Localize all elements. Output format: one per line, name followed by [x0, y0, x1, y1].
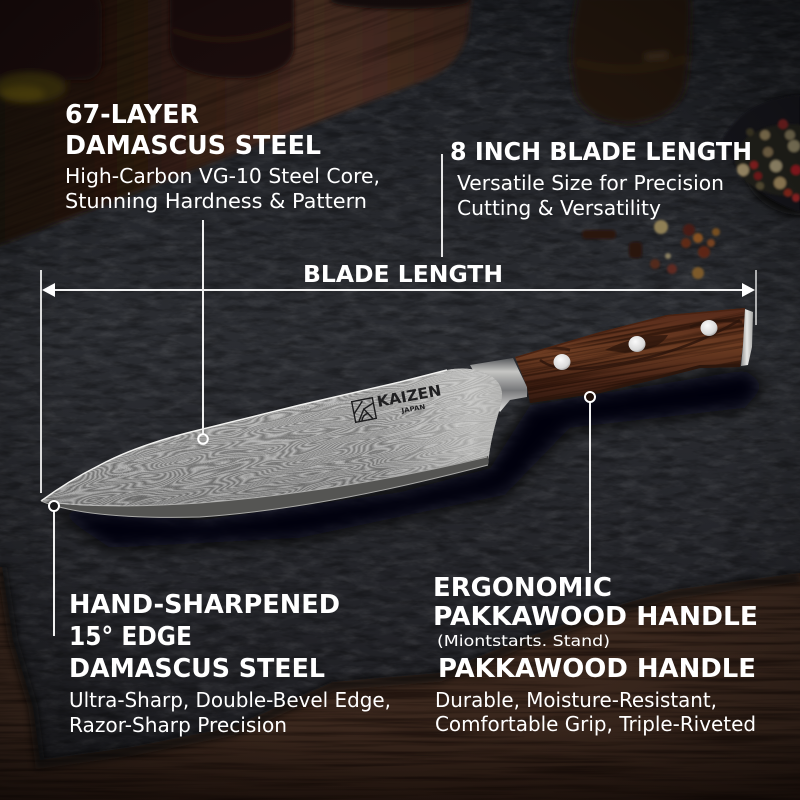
- text block: 8 inch blade length: Versatile Size for Precision: [457, 171, 724, 195]
- leader and marker: handle: [585, 392, 595, 573]
- text block: 67-layer damascus steel: [65, 100, 380, 213]
- text block: 67-layer damascus steel: High-Carbon VG-10 Steel Core,: [65, 164, 380, 188]
- logo mark: [352, 398, 376, 422]
- spice bowl with peppercorns: [722, 95, 800, 215]
- text block: hand-sharpened edge: 15° EDGE: [69, 622, 192, 652]
- text block: ergonomic pakkawood handle: Durable, Moisture-Resistant,: [435, 688, 717, 712]
- chef knife: [40, 308, 753, 518]
- bolster: [470, 358, 527, 412]
- blade length dimension arrow: [41, 270, 756, 493]
- text block: hand-sharpened edge: Razor-Sharp Precision: [69, 713, 287, 737]
- text block: 8 inch blade length: Cutting & Versatility: [457, 196, 661, 220]
- text block: ergonomic pakkawood handle: ERGONOMIC: [433, 573, 612, 603]
- text block: ergonomic pakkawood handle: [433, 573, 758, 736]
- text block: hand-sharpened edge: DAMASCUS STEEL: [69, 654, 325, 684]
- blurred glass with olive oil, top left: [0, 0, 102, 103]
- end cap: [741, 309, 753, 366]
- wooden table below the slate: [0, 560, 800, 800]
- blurred pepper mill on the board: [170, 0, 294, 78]
- text block: hand-sharpened edge: HAND-SHARPENED: [69, 590, 340, 620]
- text block: 67-layer damascus steel: 67-LAYER: [65, 100, 199, 130]
- knife shadow: [50, 370, 765, 548]
- text block: ergonomic pakkawood handle: PAKKAWOOD HANDLE: [438, 654, 756, 684]
- text block: ergonomic pakkawood handle: PAKKAWOOD HANDLE: [433, 602, 758, 632]
- text block: 67-layer damascus steel: Stunning Hardness & Pattern: [65, 189, 367, 213]
- blurred objects at the top of the board: [330, 0, 470, 9]
- logo subtitle: JAPAN: [400, 403, 426, 415]
- leader and marker: damascus steel: [198, 220, 208, 444]
- text block: 67-layer damascus steel: DAMASCUS STEEL: [65, 131, 321, 161]
- logo: [352, 381, 443, 422]
- blurred pepper mill, top right: [571, 0, 690, 124]
- text block: ergonomic pakkawood handle: Comfortable Grip, Triple-Riveted: [435, 712, 756, 736]
- blade with damascus pattern: [40, 368, 502, 518]
- rivets: [554, 320, 718, 370]
- leader and marker: edge: [49, 501, 59, 636]
- handle: [515, 308, 745, 403]
- text block: ergonomic pakkawood handle: (Miontstarts. Stand): [437, 632, 610, 650]
- wooden serving board, top left: [0, 0, 472, 247]
- text block: 8 inch blade length: [450, 137, 752, 220]
- scattered spices on the slate: [582, 220, 720, 279]
- logo wordmark: KAIZEN: [375, 381, 443, 411]
- dimension label: blade length: BLADE LENGTH: [303, 260, 503, 288]
- text block: hand-sharpened edge: Ultra-Sharp, Double-Bevel Edge,: [69, 688, 391, 712]
- leader from 8 inch heading: [441, 154, 443, 257]
- text block: 8 inch blade length: 8 INCH BLADE LENGTH: [450, 137, 752, 166]
- slate edge shadow: [2, 567, 800, 764]
- text block: hand-sharpened edge: [69, 590, 391, 737]
